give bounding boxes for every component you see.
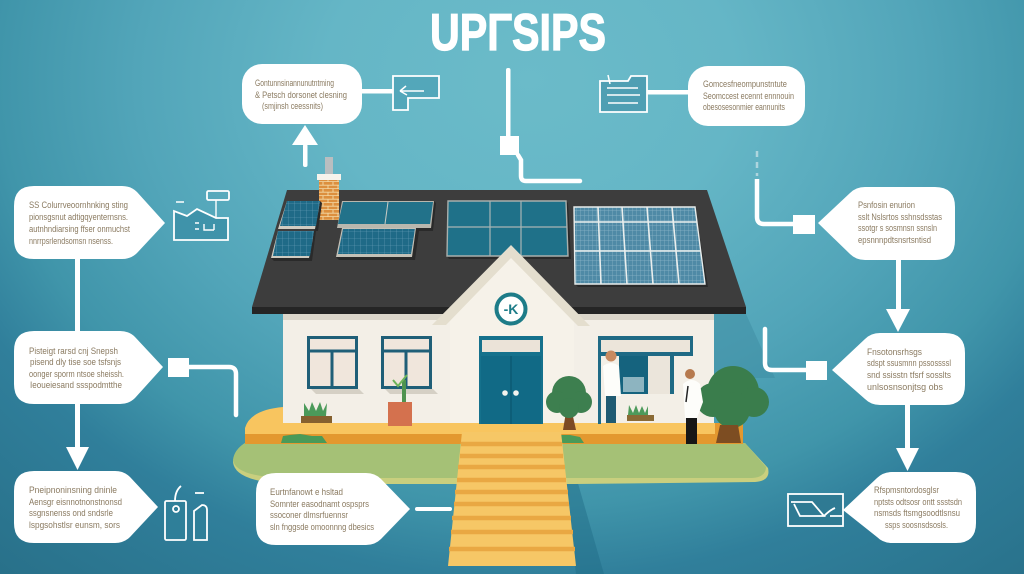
house scene	[233, 157, 775, 574]
bubble: right 2: snd ssisstn tfsrf sosslts	[867, 370, 952, 380]
window 2	[382, 338, 431, 388]
window shadows	[311, 389, 438, 394]
chimney	[317, 157, 341, 220]
bubble: left 2: Pisteigt rarsd cnj Snepsh	[29, 346, 118, 356]
connector: right bubble 2 node	[765, 329, 827, 380]
person 2	[683, 369, 703, 444]
panel shadows	[271, 201, 708, 287]
bubble: top right	[688, 66, 805, 126]
bubble: right 3: Rfspmsntordosglsr	[874, 485, 939, 495]
bubble: left 3: Aensgr eisnnotnonstnonsd	[29, 497, 122, 507]
person 1	[603, 350, 621, 423]
main door	[479, 336, 543, 424]
bubble: right 3: ssps soosnsdsosls.	[885, 520, 948, 530]
bubble: top right: obesosesonmier eannunits	[703, 102, 785, 112]
bubble: right 2: Fnsotonsrhsgs	[867, 347, 923, 357]
icon: clipboard top right	[600, 75, 647, 112]
right porch edge	[715, 423, 743, 444]
gable	[432, 245, 590, 423]
bubble: left 3	[14, 471, 158, 543]
stairs	[448, 432, 576, 566]
window 1	[308, 338, 357, 388]
solar panel 1	[278, 201, 320, 229]
side planter	[627, 405, 654, 421]
grass tuft left	[281, 434, 327, 443]
bubble: top left: (smjinsh ceessnits)	[262, 101, 323, 111]
connector: top left bubble to icon	[360, 89, 394, 94]
arrow: right bubble 1 to right bubble 2	[886, 259, 910, 332]
wall	[283, 313, 714, 423]
bubble: right 1: Psnfosin enurion	[858, 200, 915, 210]
connector: right bubble 1 node	[757, 151, 815, 234]
bubble: bottom centre	[256, 473, 410, 545]
bubble: bottom centre: Eurtnfanowt e hsltad	[270, 487, 343, 497]
connector: bottom bubble to stairs	[417, 507, 450, 511]
bubble: right 1: ssotgr s sosmnsn ssnsln	[858, 223, 937, 233]
big tree	[696, 366, 769, 443]
gable emblem	[496, 294, 526, 324]
bubble: left 3: lspgsohstlsr eunsm, sors	[29, 520, 121, 530]
bubble: bottom centre: ssoconer dlmsrfuennsr	[270, 510, 348, 520]
planter left	[301, 402, 332, 423]
roof shadow	[714, 314, 775, 378]
connector: arrow up to top left bubble	[292, 125, 318, 167]
bubble: right 1	[818, 187, 955, 260]
shadow cast by stairs and house	[561, 445, 604, 574]
right window and side door	[598, 336, 693, 424]
eave shadow	[283, 313, 714, 320]
icon: landscape tank	[174, 191, 229, 240]
bubble: left 1: SS Colurrveoornhnking sting	[29, 200, 128, 210]
bubble: left 3: ssgnsnenss ond sndsrle	[29, 508, 113, 518]
connector: top right icon to bubble	[647, 90, 689, 94]
bubble: left 1: nnrrpsrlendsomsn nsenss.	[29, 236, 113, 246]
arrow: right bubble 2 to right bubble 3	[896, 404, 919, 471]
bubble: left 2: pisend dly tise soe tsfsnjs	[30, 357, 122, 367]
connector: left bubble 1 to left bubble 2	[75, 258, 80, 332]
bubble: top left: & Petsch dorsonet clesning	[255, 90, 347, 100]
lawn top	[233, 443, 766, 478]
bubble: right 3: nsmsds ftsmgsoodtlsnsu	[874, 508, 960, 518]
terracotta pot with plant	[388, 375, 412, 426]
bubble: right 1: epsnnnpdtsnsrtsntisd	[858, 235, 931, 245]
roof fascia	[252, 307, 746, 314]
bubble: left 3: Pneipnoninsning dninle	[29, 485, 117, 495]
bubble: right 3	[843, 472, 976, 543]
bubble: left 1	[14, 186, 165, 259]
icon: chart box	[788, 494, 843, 526]
arrow: left bubble 2 to left bubble 3	[66, 403, 89, 470]
solar panel 5	[447, 201, 568, 256]
bubble: right 2: sdspt ssusmnn pssossssl	[867, 358, 951, 368]
lawn rim	[233, 443, 768, 484]
connector: centre line with node	[500, 68, 580, 181]
bubble: left 2: oonger sporm ntsoe sheissh.	[29, 369, 124, 379]
solar panel 4	[336, 228, 416, 257]
grass tuft right	[560, 435, 584, 443]
solar panel 6	[574, 207, 705, 284]
porch edge	[245, 434, 717, 444]
bubble: left 2	[14, 331, 163, 404]
connector: left bubble 2 node	[168, 358, 236, 415]
bubble: left 2: Ieoueiesand ssspodmtthe	[30, 380, 122, 390]
bubble: right 1: sslt Nslsrtos sshnsdsstas	[858, 212, 943, 222]
bubble: right 3: nptsts odtsosr ontt ssstsdn	[874, 497, 962, 507]
bubble: top right: Seomccest ecennt ennnouin	[703, 91, 794, 101]
bubble: bottom centre: Somnter easodnamt ospsprs	[270, 499, 370, 509]
icon: document top left	[393, 76, 439, 110]
bubble: top left	[242, 64, 362, 124]
title: UPΓSIPS	[430, 4, 606, 62]
solar panel 3	[337, 201, 434, 228]
icon: tags	[165, 486, 207, 540]
porch	[245, 407, 715, 434]
small tree	[546, 376, 592, 430]
bubble: left 1: pionsgsnut adtigqyenternsns.	[29, 212, 128, 222]
bubble: left 1: autnhndiarsing ffser onmuchst	[29, 224, 130, 234]
bubble: top right: Gomcesfneompunstntute	[703, 79, 787, 89]
bubble: right 2: unlsosnsonjtsg obs	[867, 382, 944, 392]
bubble: right 2	[832, 333, 965, 405]
solar panel 2	[271, 231, 314, 258]
gable emblem: -K	[504, 301, 518, 317]
roof	[252, 190, 746, 307]
bubble: bottom centre: sln fnggsde omoonnng dbesics	[270, 522, 375, 532]
bubble: top left: Gontunnsinannunutntming	[255, 78, 334, 88]
